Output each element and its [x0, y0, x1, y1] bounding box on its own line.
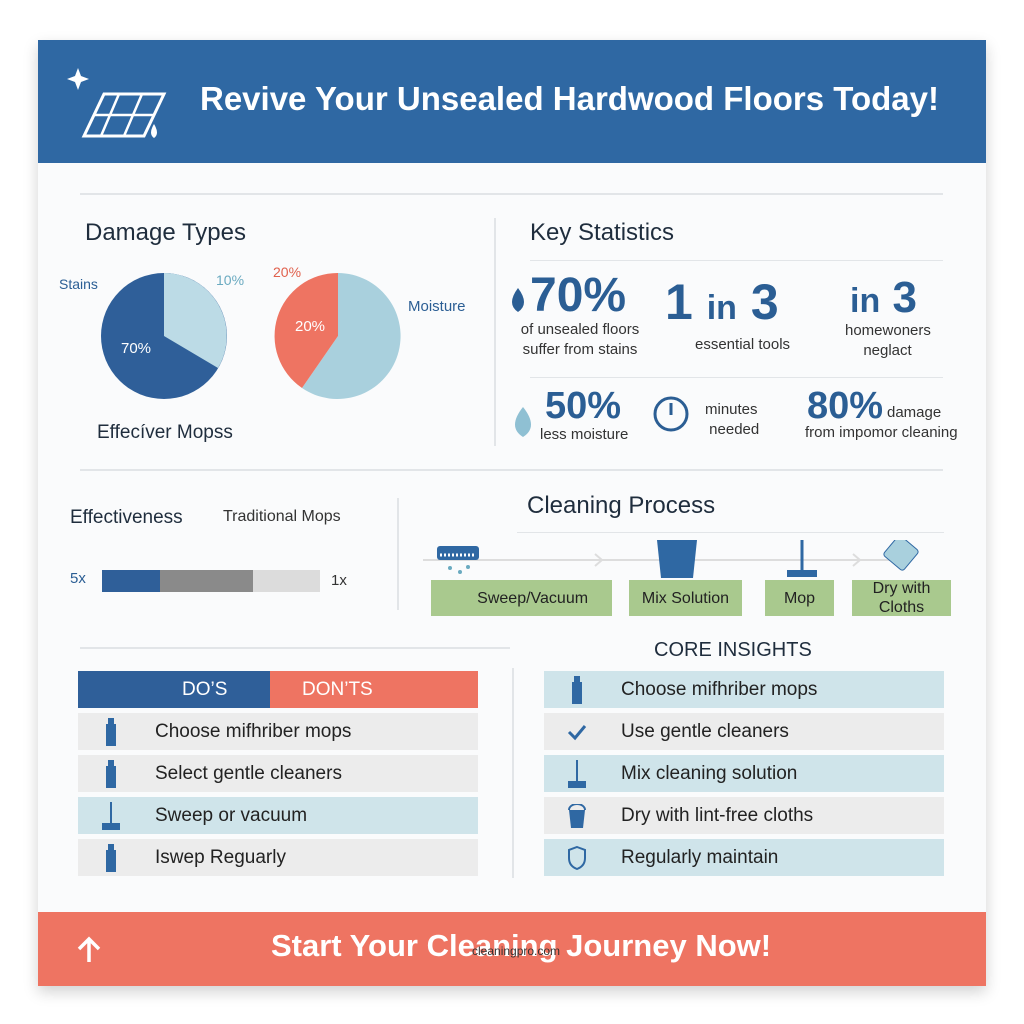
panel: key statistics [512, 219, 958, 443]
stat: 50% [515, 385, 628, 443]
stat: 80%: from impomor cleaning [805, 424, 958, 441]
stat: minutes [654, 396, 759, 438]
panel: do's and don'ts: Iswep Reguarly [155, 846, 286, 868]
footer banner [38, 912, 986, 986]
stat: 80%: damage [887, 404, 941, 421]
panel: effectiveness: Traditional Mops [223, 508, 341, 525]
stat: 1 in 3: essential tools [695, 336, 790, 353]
stat: 50%: less moisture [540, 426, 628, 443]
footer banner: cleaningpro.com [472, 944, 560, 958]
icon: floor [67, 68, 166, 138]
stat: 80%: 80% [807, 385, 883, 427]
step: mop [765, 580, 834, 616]
stat: 70% [512, 269, 639, 358]
panel: effectiveness [70, 507, 347, 592]
stat: 1 in 3 [665, 274, 790, 353]
icon: arrow up [78, 936, 100, 962]
stat: minutes: minutes [705, 401, 758, 418]
arrows [423, 540, 919, 578]
panel: core insights: Regularly maintain [621, 846, 778, 868]
panel: do's and don'ts: DON’TS [302, 678, 373, 700]
panel: do's and don'ts: Select gentle cleaners [155, 762, 342, 784]
panel: core insights: Dry with lint-free cloths [621, 804, 813, 826]
caption: Effecíver Mopss [97, 422, 233, 443]
panel: damage types [59, 219, 466, 443]
heading: Damage Types [85, 219, 246, 246]
step: sweep [431, 580, 612, 616]
pie chart: stains: 20% [273, 264, 301, 280]
panel: cleaning process: Cleaning Process [527, 492, 715, 519]
pie chart: stains: 10% [216, 272, 244, 288]
step: mop: Mop [784, 590, 815, 606]
stat: in 3 [845, 273, 931, 359]
panel: do's and don'ts: DO’S [182, 678, 227, 700]
step: dry: Dry with [873, 580, 930, 597]
step: sweep: Sweep/Vacuum [477, 590, 588, 606]
panel: core insights: Choose mifhriber mops [621, 678, 817, 700]
step: dry: Cloths [879, 599, 924, 616]
stat: 70%: of unsealed floors [521, 321, 639, 338]
pie chart: stains: Stains [59, 276, 98, 292]
panel: core insights: CORE INSIGHTS [654, 639, 812, 661]
panel: effectiveness: 5x [70, 570, 86, 587]
panel: effectiveness: Effectiveness [70, 507, 183, 528]
panel: do's and don'ts: Choose mifhriber mops [155, 720, 351, 742]
stat: 1 in 3: 1 in 3 [665, 274, 779, 330]
panel: do's and don'ts: Sweep or vacuum [155, 804, 307, 826]
panel: core insights [544, 639, 944, 876]
stat: 70%: 70% [530, 269, 626, 322]
call to action: Start Your Cleaning Journey Now! [271, 928, 771, 963]
stat: in 3: homewoners [845, 322, 931, 339]
header [38, 40, 986, 163]
panel: core insights: Use gentle cleaners [621, 720, 789, 742]
pie chart: stains: 70% [121, 340, 151, 357]
stat: 70%: suffer from stains [523, 341, 637, 358]
pie chart: stains: 20% [295, 318, 325, 335]
stat: 50%: 50% [545, 385, 621, 427]
stat: 80% [805, 385, 958, 441]
panel: core insights: Mix cleaning solution [621, 762, 797, 784]
heading: Key Statistics [530, 219, 674, 246]
title: Revive Your Unsealed Hardwood Floors Today! [200, 80, 939, 117]
step: mix [629, 580, 742, 616]
panel: do's and don'ts [78, 671, 478, 876]
step: dry [852, 580, 951, 616]
step: mix: Mix Solution [642, 590, 729, 606]
pie chart: stains: Moisture [408, 298, 466, 315]
stat: in 3: neglact [863, 342, 912, 359]
bar chart [102, 570, 320, 592]
stat: minutes: needed [709, 421, 759, 438]
stat: in 3: in 3 [850, 273, 917, 322]
pie chart: stains [59, 264, 466, 399]
panel: effectiveness: 1x [331, 572, 347, 589]
